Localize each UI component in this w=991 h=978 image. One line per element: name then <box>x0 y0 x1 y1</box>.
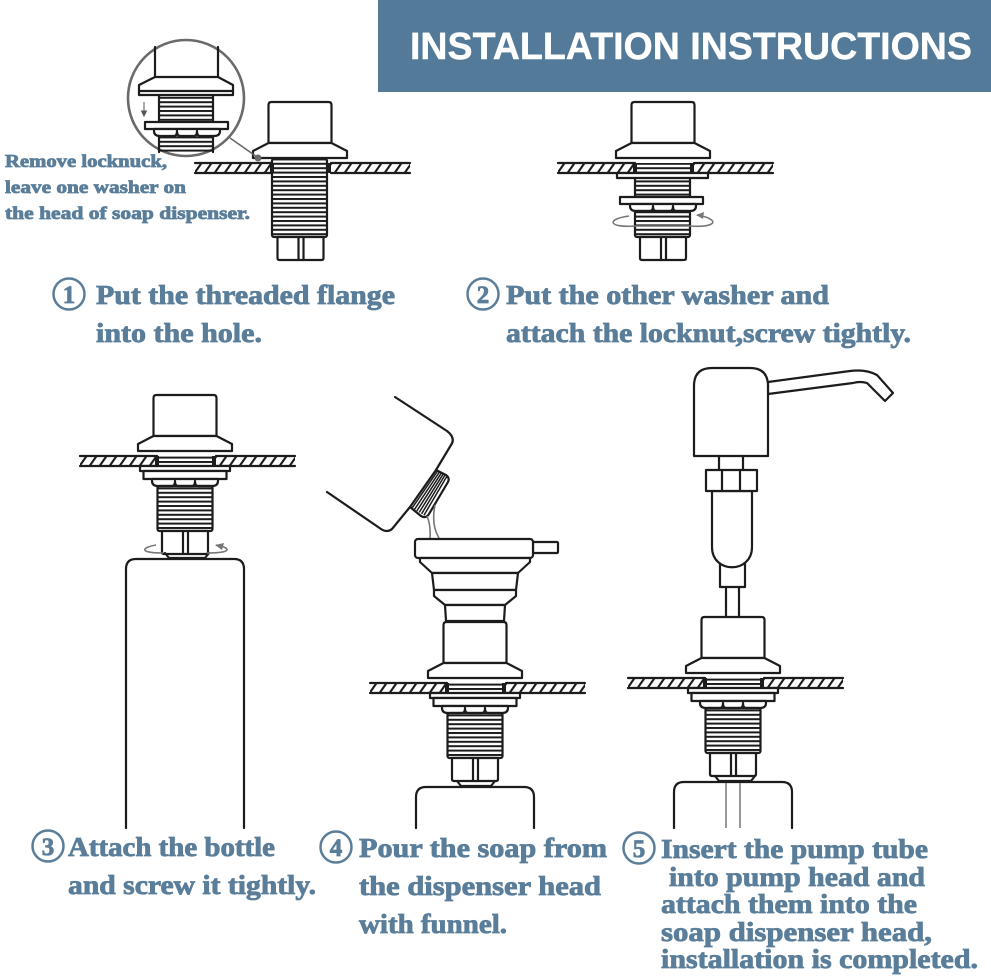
step 1 caption: 1 <box>63 282 75 309</box>
step 3 caption: and screw it tightly. <box>68 870 316 900</box>
title banner: INSTALLATION INSTRUCTIONS <box>410 26 972 68</box>
step 5 caption: soap dispenser head, <box>661 917 932 947</box>
step 1 illustration <box>195 102 410 260</box>
step 1 caption: Put the threaded flange <box>96 280 395 310</box>
callout: remove locknut note: leave one washer on <box>5 177 186 197</box>
step 2 caption <box>468 278 911 348</box>
callout: remove locknut note: the head of soap dispenser. <box>5 203 250 223</box>
step 5 caption: 5 <box>633 836 645 863</box>
step 2 caption: Put the other washer and <box>506 280 829 310</box>
callout: remove locknut note: Remove locknuck, <box>5 151 167 171</box>
step 5 caption: into pump head and <box>669 862 925 892</box>
step 4 caption: the dispenser head <box>359 871 601 901</box>
callout: remove locknut note <box>5 151 250 223</box>
step 5 illustration: pump inserted <box>628 368 893 828</box>
step 5 caption <box>624 832 978 974</box>
step 4 caption: 4 <box>330 835 343 862</box>
step 2 caption: attach the locknut,screw tightly. <box>506 318 911 348</box>
title banner <box>378 0 991 92</box>
step 4 caption: Pour the soap from <box>359 833 608 863</box>
funnel <box>415 539 558 621</box>
pump head <box>694 368 893 617</box>
step 1 caption: into the hole. <box>96 318 262 348</box>
tilted bottle <box>327 397 453 538</box>
step 5 caption: attach them into the <box>661 889 917 919</box>
step 3 illustration: bottle attached <box>80 395 295 828</box>
step 4 illustration: pouring soap with funnel <box>327 397 585 828</box>
rotation arrow <box>145 543 227 553</box>
step 3 caption: 3 <box>42 834 54 861</box>
step 2 illustration <box>558 102 773 260</box>
step 4 caption <box>320 832 608 939</box>
step 3 caption <box>32 830 316 900</box>
step 5 caption: installation is completed. <box>661 944 978 974</box>
step 4 caption: with funnel. <box>359 909 507 939</box>
step 5 caption: Insert the pump tube <box>661 834 928 864</box>
step 3 caption: Attach the bottle <box>68 832 275 862</box>
step 1 caption <box>54 278 395 348</box>
magnifier detail <box>128 40 262 162</box>
step 2 caption: 2 <box>477 282 489 309</box>
rotation arrow <box>613 212 713 226</box>
